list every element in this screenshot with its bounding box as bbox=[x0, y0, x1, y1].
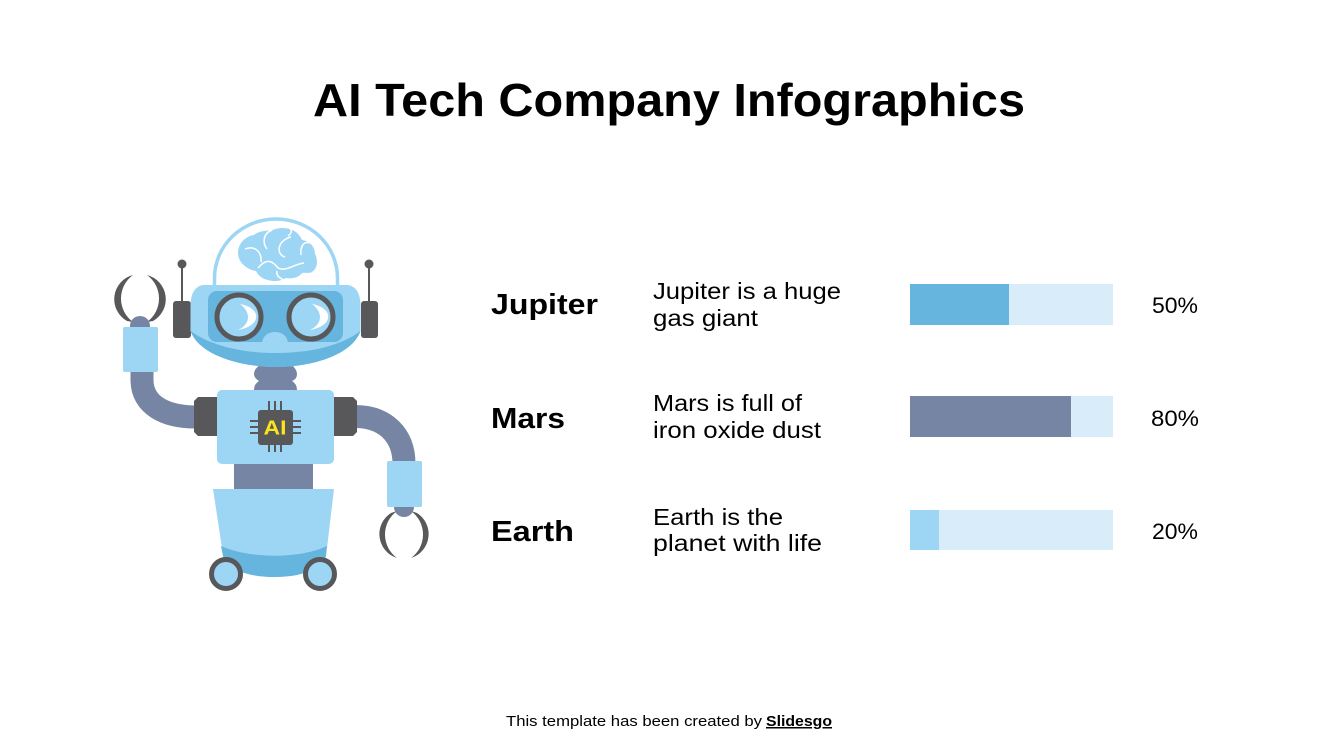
planet name: Jupiter bbox=[491, 289, 598, 321]
robot neck bbox=[254, 365, 297, 390]
robot torso bbox=[217, 390, 334, 464]
row: Mars bbox=[491, 390, 1199, 443]
description bbox=[653, 390, 822, 443]
row: Earth bbox=[491, 504, 1198, 556]
description: Mars is full of bbox=[653, 390, 803, 416]
robot right claw bbox=[379, 511, 429, 558]
robot shoulders bbox=[194, 397, 357, 436]
percentage: 20% bbox=[1152, 519, 1198, 544]
row: Jupiter bbox=[491, 278, 1198, 331]
description: planet with life bbox=[653, 530, 822, 556]
bar value bbox=[910, 510, 939, 550]
robot base shade bbox=[221, 546, 327, 577]
description: gas giant bbox=[653, 305, 759, 331]
description: iron oxide dust bbox=[653, 417, 822, 443]
icon: AI chip: AI bbox=[264, 418, 286, 440]
robot base bbox=[213, 489, 334, 577]
description: Jupiter is a huge bbox=[653, 278, 841, 304]
robot right wheel bbox=[306, 560, 334, 588]
robot antennas bbox=[173, 260, 378, 338]
robot left wheel bbox=[212, 560, 240, 588]
percentage: 80% bbox=[1151, 406, 1199, 431]
robot right eye bbox=[289, 295, 333, 339]
bar value bbox=[910, 284, 1009, 325]
robot right arm bbox=[355, 416, 404, 464]
description: Earth is the bbox=[653, 504, 783, 530]
bar track bbox=[910, 510, 1113, 550]
bar track bbox=[910, 396, 1113, 437]
robot head bbox=[190, 285, 360, 367]
title: AI Tech Company Infographics bbox=[313, 74, 1025, 126]
robot waist bbox=[234, 462, 313, 490]
robot visor bbox=[208, 291, 343, 342]
percentage: 50% bbox=[1152, 293, 1198, 318]
icon: AI chip bbox=[250, 401, 301, 452]
icon: brain bbox=[238, 228, 317, 281]
description bbox=[653, 278, 841, 331]
bar track bbox=[910, 284, 1113, 325]
robot claw joints bbox=[130, 316, 414, 517]
footer credit: This template has been created by bbox=[506, 713, 763, 730]
description bbox=[653, 504, 822, 556]
robot wrists bbox=[123, 327, 422, 507]
robot chin shade bbox=[190, 331, 360, 367]
robot nose bbox=[262, 332, 288, 343]
robot left eye bbox=[217, 295, 261, 339]
planet name: Earth bbox=[491, 516, 574, 548]
robot left arm bbox=[142, 368, 196, 417]
footer credit: Slidesgo bbox=[766, 713, 832, 730]
robot glass dome bbox=[214, 219, 338, 286]
planet name: Mars bbox=[491, 403, 565, 435]
robot left claw bbox=[114, 275, 166, 322]
icon: robot bbox=[114, 219, 429, 588]
bar value bbox=[910, 396, 1071, 437]
